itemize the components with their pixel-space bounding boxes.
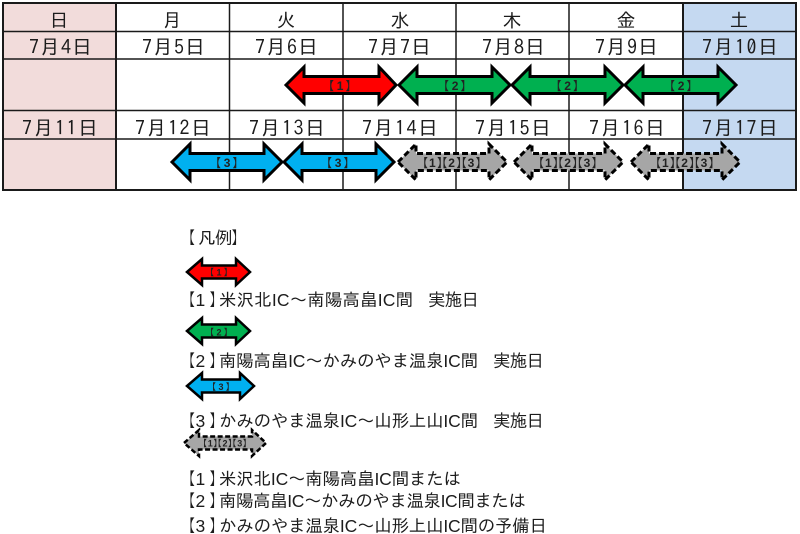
arrow: section 3 July 13-14 — [284, 144, 394, 180]
panel: calendar table — [3, 3, 796, 190]
arrow: section 1 July 6-7 — [286, 67, 396, 103]
panel: legend — [178, 228, 547, 534]
arrow: section 3 July 12-13 — [172, 144, 282, 180]
arrow: section 2 July 9-10: 【2】 — [663, 79, 698, 93]
legend text: section 2: 【2】 — [178, 351, 226, 371]
dates row: week 2: 7月14日 — [362, 118, 438, 138]
arrow: section 1 July 6-7: 【1】 — [322, 79, 358, 93]
dates row: week 1: 7月9日 — [595, 37, 658, 57]
legend text: section 2: 実施日 — [493, 351, 544, 371]
legend icon: gray dashed arrow: 【1】【2】【3】 — [198, 438, 252, 448]
legend icon: blue arrow — [187, 373, 254, 399]
legend text: reserve day lines: 【1】 — [178, 469, 226, 489]
dates row: week 2 — [22, 118, 778, 138]
weekday header row: 木 — [502, 11, 522, 30]
dates row: week 2: 7月17日 — [702, 118, 778, 138]
arrow: section 2 July 7-8 — [399, 67, 510, 103]
arrow: section 3 July 13-14: 【3】 — [320, 156, 356, 170]
Sunday column shading — [3, 3, 116, 190]
arrow: reserve day July 16-17: 【1】【2】【3】 — [649, 156, 721, 170]
weekday header row: 土 — [730, 11, 748, 30]
legend text: reserve day lines — [178, 469, 547, 534]
dates row: week 1: 7月6日 — [255, 37, 318, 57]
legend text: section 1: 【1】 — [178, 290, 226, 310]
dates row: week 1: 7月5日 — [142, 37, 205, 57]
legend text: reserve day lines: 南陽高畠IC～かみのやま温泉IC間または — [219, 491, 526, 511]
legend text: section 2: 南陽高畠IC～かみのやま温泉IC間 — [219, 351, 478, 371]
dates row: week 2: 7月15日 — [475, 118, 551, 138]
legend text: section 1 — [178, 290, 479, 310]
arrow: section 2 July 8-9 — [512, 67, 623, 103]
weekday header row: 月 — [162, 11, 182, 30]
arrow: reserve day July 15-16: 【1】【2】【3】 — [532, 156, 604, 170]
dates row: week 1: 7月7日 — [368, 37, 431, 57]
weekday header row: 日 — [50, 11, 68, 30]
arrow: reserve day July 16-17 — [631, 144, 740, 180]
weekday header row: 火 — [276, 11, 296, 30]
legend icon: red arrow — [187, 259, 250, 285]
weekday header row — [50, 11, 748, 30]
dates row: week 2: 7月13日 — [249, 118, 325, 138]
weekday header row: 水 — [390, 11, 410, 30]
dates row: week 1: 7月4日 — [29, 37, 92, 57]
legend icon: gray dashed arrow — [184, 430, 266, 456]
legend icon: blue arrow: 【3】 — [207, 382, 235, 392]
arrow: section 2 July 7-8: 【2】 — [437, 79, 472, 93]
arrow: section 3 July 12-13: 【3】 — [209, 156, 244, 170]
legend text: section 3: かみのやま温泉IC～山形上山IC間 — [219, 411, 478, 431]
dates row: week 2: 7月11日 — [22, 118, 98, 138]
legend icon: green arrow: 【2】 — [205, 328, 233, 338]
legend icon: green arrow — [187, 318, 250, 344]
weekday header row: 金 — [616, 11, 636, 30]
Saturday column shading — [683, 3, 796, 190]
legend text: section 1: 実施日 — [428, 290, 479, 310]
arrow: reserve day July 15-16 — [514, 144, 623, 180]
legend icon: red arrow: 【1】 — [205, 268, 233, 278]
legend text: section 1: 米沢北IC～南陽高畠IC間 — [219, 290, 413, 310]
dates row: week 1: 7月10日 — [702, 37, 778, 57]
dates row: week 1 — [29, 37, 778, 57]
legend text: section 3: 実施日 — [493, 411, 544, 431]
dates row: week 1: 7月8日 — [482, 37, 545, 57]
arrow: section 2 July 9-10 — [625, 67, 736, 103]
legend text: reserve day lines: 米沢北IC～南陽高畠IC間または — [219, 469, 461, 489]
arrow: reserve day July 14-15: 【1】【2】【3】 — [416, 156, 488, 170]
legend heading: 【凡例】 — [178, 228, 248, 248]
arrow: reserve day July 14-15 — [398, 144, 507, 180]
arrow: section 2 July 8-9: 【2】 — [550, 79, 585, 93]
legend text: section 3: 【3】 — [178, 411, 226, 431]
legend text: reserve day lines: 【2】 — [178, 491, 226, 511]
dates row: week 2: 7月16日 — [589, 118, 665, 138]
dates row: week 2: 7月12日 — [135, 118, 211, 138]
